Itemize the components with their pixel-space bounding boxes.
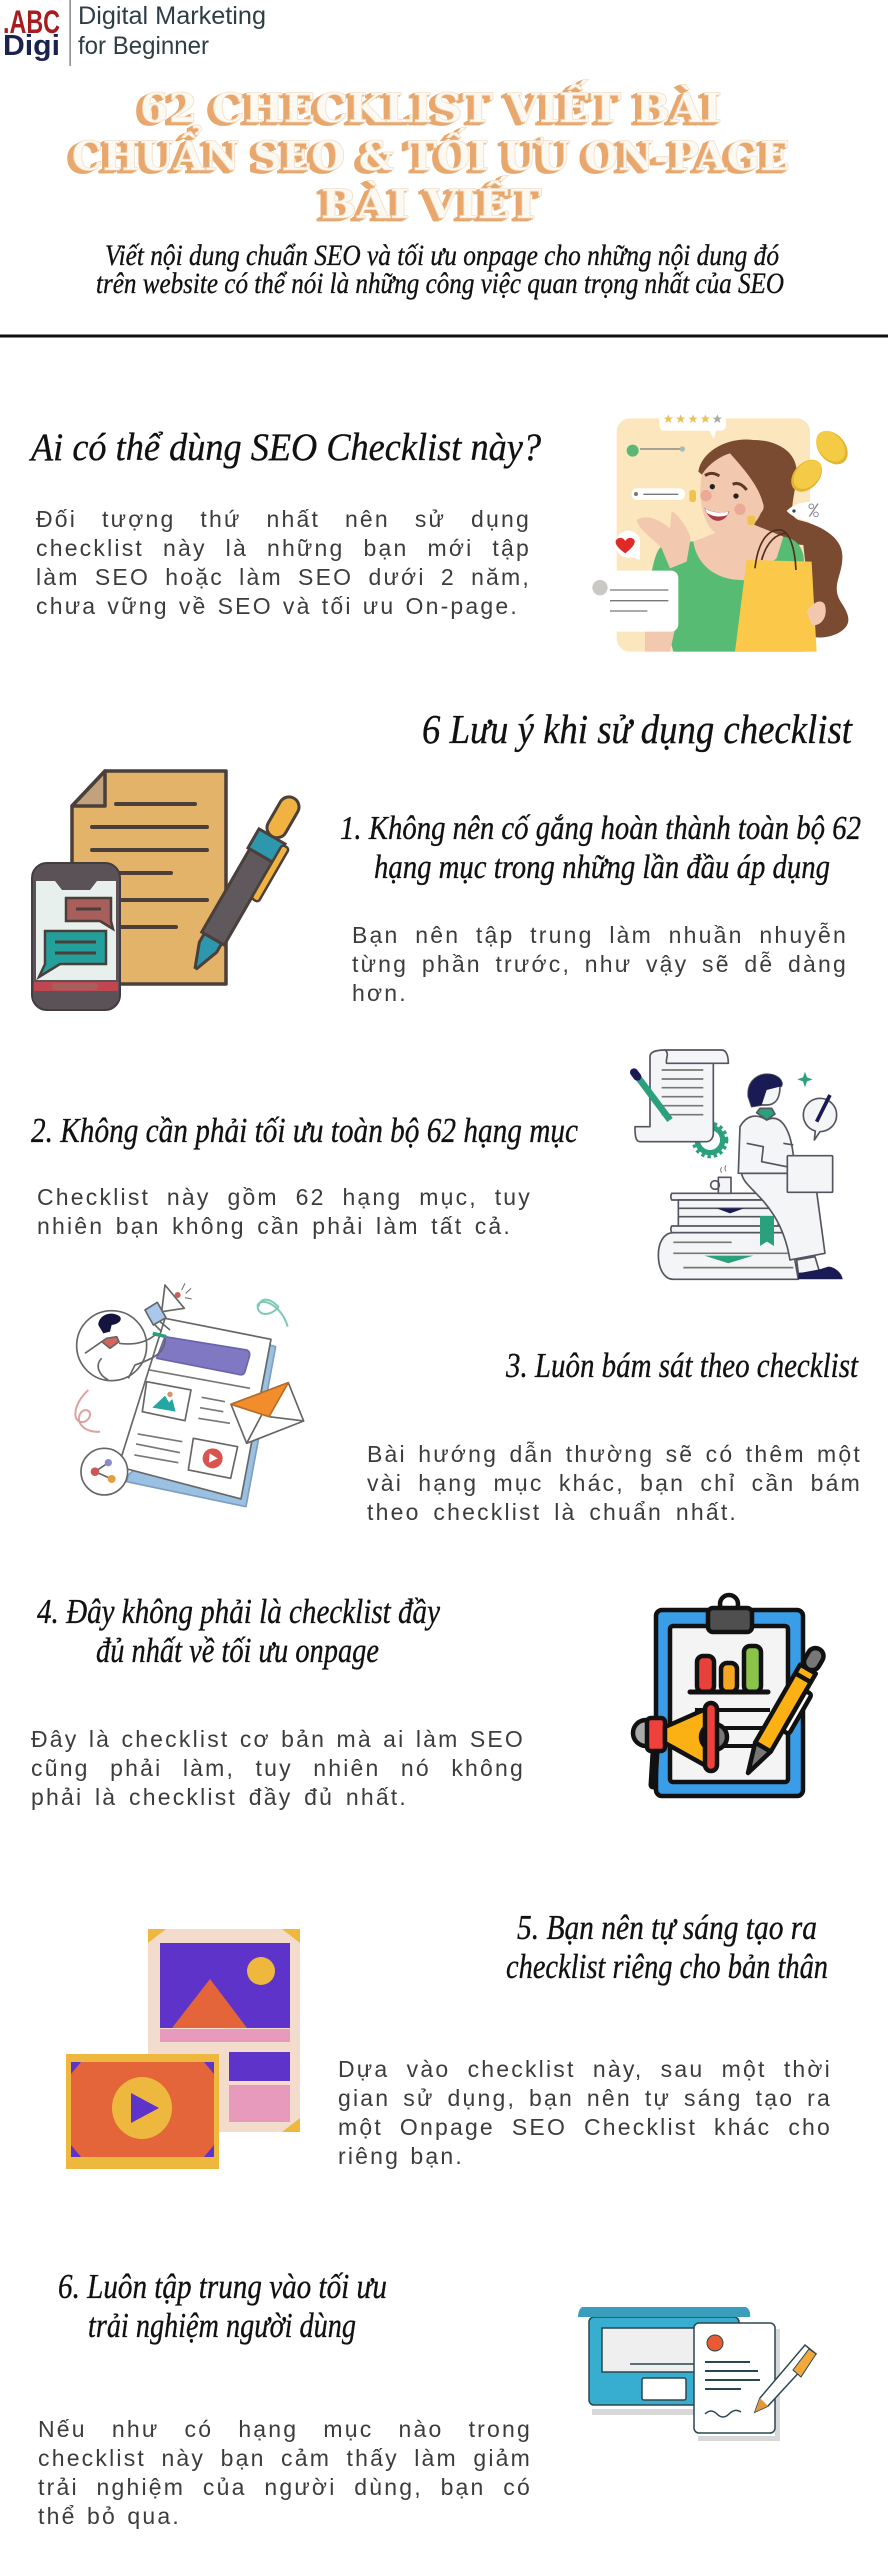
text block: note 5: Dựa vào checklist này, sau một thời	[338, 2056, 832, 2082]
text block: note 3: Bài hướng dẫn thường sẽ có thêm một	[367, 1441, 862, 1467]
text block: note 4: Đây là checklist cơ bản mà ai làm SEO	[31, 1726, 525, 1752]
heading: note 6: trải nghiệm người dùng	[88, 2306, 356, 2345]
title: 62 CHECKLIST VIẾT BÀI	[140, 80, 722, 132]
heading: note 5	[506, 1908, 828, 1986]
text block: note 5	[338, 2055, 838, 2171]
text block: note 2	[37, 1183, 537, 1241]
logo: ABC Digi: for Beginner	[78, 32, 209, 60]
subtitle: Viết nội dung chuẩn SEO và tối ưu onpage cho những nội dung đó	[105, 239, 779, 272]
title: CHUẨN SEO & TỐI ƯU ON-PAGE	[72, 126, 790, 180]
text block: note 4: cũng phải làm, tuy nhiên nó không	[31, 1755, 525, 1781]
logo: ABC Digi: .ABC	[3, 4, 60, 40]
logo: ABC Digi: Digital Marketing	[78, 2, 266, 30]
text block: note 6: thể bỏ qua.	[38, 2503, 181, 2529]
icon: document, phone and pen	[32, 771, 312, 1010]
heading: note 4: 4. Đây không phải là checklist đầy	[37, 1592, 440, 1631]
text block: note 1: Bạn nên tập trung làm nhuần nhuyễn	[352, 922, 848, 948]
heading: note 4: đủ nhất về tối ưu onpage	[96, 1631, 379, 1670]
icon: laptop, contract and pen	[578, 2307, 816, 2441]
text block: note 6: checklist này bạn cảm thấy làm giảm	[38, 2445, 532, 2471]
heading: note 6	[58, 2267, 387, 2345]
illustration: woman on books with laptop	[634, 1050, 843, 1279]
panel: note 4	[31, 1592, 833, 1812]
panel: note 3	[75, 1283, 867, 1527]
text block: note 6: trải nghiệm của người dùng, bạn có	[38, 2474, 532, 2500]
panel: note 6	[38, 2267, 816, 2531]
panel: note 1	[32, 771, 861, 1010]
title	[72, 80, 790, 228]
text block: note 6	[38, 2415, 538, 2531]
text block: note 3: theo checklist là chuẩn nhất.	[367, 1499, 738, 1525]
title: BÀI VIẾT	[321, 176, 542, 228]
heading: note 1	[340, 810, 861, 886]
text block: who can use: checklist này là những bạn mới tập	[36, 535, 531, 561]
text block: note 4	[31, 1725, 531, 1812]
text block: who can use: làm SEO hoặc làm SEO dưới 2 năm,	[36, 564, 531, 590]
text block: note 3	[367, 1440, 867, 1527]
logo: ABC Digi: Digi	[3, 30, 60, 62]
text block: note 1: từng phần trước, như vậy sẽ dễ dàng	[352, 951, 848, 977]
text block: note 1: hơn.	[352, 980, 408, 1006]
icon: picture and video cards	[66, 1929, 300, 2169]
text block: who can use: chưa vững về SEO và tối ưu On-page.	[36, 593, 519, 619]
heading: note 2: 2. Không cần phải tối ưu toàn bộ 62 hạng mục	[31, 1111, 578, 1150]
text block: note 2: nhiên bạn không cần phải làm tất cả.	[37, 1213, 512, 1239]
illustration: marketer with web page	[75, 1283, 304, 1507]
text block: note 5: một Onpage SEO Checklist khác cho	[338, 2114, 832, 2140]
heading: 6 notes: 6 Lưu ý khi sử dụng checklist	[422, 706, 853, 752]
heading: who can use: Ai có thể dùng SEO Checklist này?	[28, 426, 541, 469]
heading: note 5: 5. Bạn nên tự sáng tạo ra	[517, 1908, 817, 1947]
text block: note 1	[352, 921, 852, 1008]
illustration: woman with shopping bag	[592, 413, 854, 652]
panel: note 5	[66, 1908, 838, 2171]
heading: note 4	[37, 1592, 440, 1670]
text block: note 6: Nếu như có hạng mục nào trong	[38, 2416, 532, 2442]
logo: ABC Digi	[3, 0, 266, 66]
text block: note 4: phải là checklist đầy đủ nhất.	[31, 1784, 408, 1810]
text block: who can use: Đối tượng thứ nhất nên sử dụng	[36, 506, 531, 532]
heading: note 6: 6. Luôn tập trung vào tối ưu	[58, 2267, 387, 2306]
panel: note 2	[31, 1050, 843, 1279]
text block: note 3: vài hạng mục khác, bạn chỉ cần bám	[367, 1470, 862, 1496]
icon: clipboard with chart and megaphone	[633, 1595, 833, 1796]
text block: note 2: Checklist này gồm 62 hạng mục, tuy	[37, 1184, 532, 1210]
text block: note 5: riêng bạn.	[338, 2143, 464, 2169]
panel: who can use	[28, 413, 854, 652]
subtitle	[96, 239, 784, 300]
text block: note 5: gian sử dụng, bạn nên tự sáng tạo ra	[338, 2085, 832, 2111]
text block: who can use	[36, 505, 536, 621]
